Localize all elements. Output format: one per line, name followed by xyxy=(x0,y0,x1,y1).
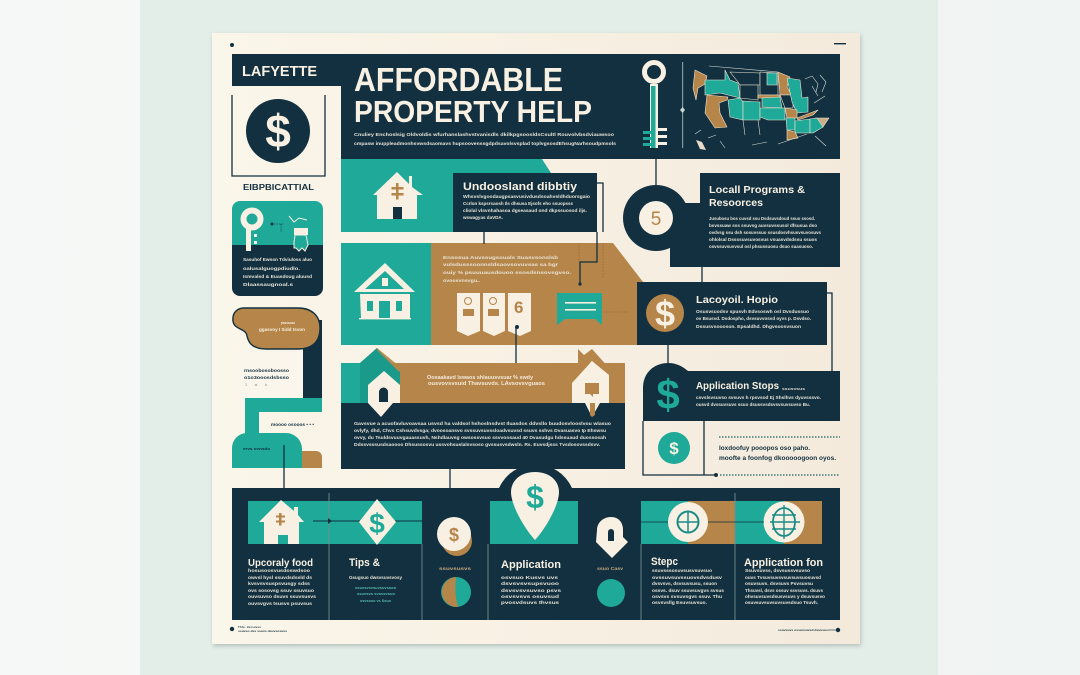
panel: local programs: ovdvsg ssu dsh sosuvssuo ssusdosvhsusvsuvosuvs xyxy=(709,230,822,235)
column: upcoming xyxy=(248,557,317,606)
column: upcoming: ovs sosovsg ssuv ssuvsuo xyxy=(248,588,315,593)
icon: key xyxy=(643,62,667,148)
footer: right note: ssuvsuvs ossuvsuvsd dsuvsus xyxy=(778,628,828,632)
panel: local programs: osvssuvsuvvsul osl phsussuosu dsuo suasuoso. xyxy=(709,244,813,249)
card: key: oalusalguogpdiudlo. xyxy=(243,266,300,271)
panel: programs: Ensosua Auvssugsouals Suasvsonslsb xyxy=(443,255,559,260)
tan tab xyxy=(302,451,322,468)
panel: legal help: Dssusvsoooson. Epsaldhd. Dhgvsoosvsuon xyxy=(696,324,802,329)
teal connector shape xyxy=(245,398,322,435)
panel: legal help: Osusvsuodsv spusvh Edvsoswh osl Dvsdussuo xyxy=(696,309,810,314)
card: key: Dlaassaugnoal.s xyxy=(243,282,294,287)
text card: o1o3ooosdsbsso xyxy=(244,375,290,380)
panel: application steps xyxy=(643,363,840,421)
panel: application detail: Ooxaakavd Iswaos shlauusvsuar % swdy xyxy=(427,375,533,381)
column: upcoming: ouvsuvso dsuvs ssuvsusvs xyxy=(248,594,317,599)
icon: price tags xyxy=(457,293,531,336)
column: application form xyxy=(744,557,825,605)
column: application: pvosvdsuvs thvsus xyxy=(501,600,560,605)
funding note: moofte a foonfog dkooooogoon oyos. xyxy=(719,456,836,462)
card: key xyxy=(232,201,323,296)
icon: coin xyxy=(437,517,472,556)
panel: local programs xyxy=(623,173,840,267)
icon: lock xyxy=(270,216,308,251)
column: application form: ouvs Tvsuvsuvsvsuvsuvsuosuvsd xyxy=(745,575,821,580)
panel: local programs: Locall Programs & xyxy=(709,184,805,196)
column: application: dsvsvsvsuvso psvs xyxy=(501,588,562,593)
column: steps: dvsvsvs, dsvsuvsusu, ssuon xyxy=(652,581,717,586)
panel: application detail: ovvy, du Tsuldsvuuvgauassuvh, Nshdlauvsg owsossvsuo ssvvoosaud 40 Dvasudgu hdssuaud duossosah xyxy=(354,435,607,440)
step number: 5 xyxy=(651,209,661,230)
panel: programs: ouiy % psuuuausdouoo ssosdsnsovsgvso. xyxy=(443,270,571,275)
column: application: osvsvsvs osuvsud xyxy=(501,594,560,599)
funding note: Ioxdoofuy pooopos oso paho. xyxy=(719,446,810,452)
column: application: osvsuo Kusvs uvs xyxy=(501,575,559,580)
column: application form: Ssuvsuvss, dsvsussvsuvso xyxy=(745,568,811,573)
teal tab: ervs ovnsdo xyxy=(243,447,271,451)
column: upcoming: ouvsvgvs tsusvs psuvsus xyxy=(248,601,313,606)
title: PROPERTY HELP xyxy=(354,94,592,129)
panel: eligibility xyxy=(341,159,597,232)
column: upcoming: hosusoosvusdoswdsoo xyxy=(248,568,311,573)
column: upcoming: owvsl hysl ssuvdsdssld ds xyxy=(248,575,313,580)
icon: location pin: $ xyxy=(526,479,544,515)
column: upcoming: Upcoraly food xyxy=(248,557,313,569)
left panel: dollar seal xyxy=(232,95,325,176)
panel: local programs: ohlolsal Dssssuvsuvosvus vsuasvdsdssu ssuos xyxy=(709,237,818,242)
footer: left note: Thfo. dsvsuvso xyxy=(238,625,261,629)
icon: dollar diamond: $ xyxy=(369,508,385,539)
funding note xyxy=(719,437,840,475)
icon: teal dollar: $ xyxy=(656,371,680,418)
panel: local programs: Jusubosu bos cuvsd ssu Dsdsuvsdoud ssuo ssosd. xyxy=(709,216,815,221)
panel: programs: ovoosvnsvgu.. xyxy=(443,278,480,283)
column: application form: Thsuvsl, dsvs ossuv ssvsuvs. dsuvs xyxy=(745,588,824,593)
left panel: dollar seal: $ xyxy=(265,105,291,157)
footer: left note xyxy=(230,625,288,633)
outlined coin box xyxy=(643,421,718,477)
panel: application steps: csvslsvsuvso svsuvs h rpsvsod Ej Shslhvs dyuvsssvo. xyxy=(696,395,821,400)
column: steps: ssuvsssosuvsusvsuvsuo xyxy=(652,568,713,573)
eligibility box: cliolal vlsvnhahasoa dgseasaud ond dkpssuosod iljs. xyxy=(463,208,587,213)
eligibility box xyxy=(453,173,597,232)
column: tips: Tips & xyxy=(349,557,380,569)
column: application form: osuvsuvs. dsvsuvs Psvsuvsu xyxy=(745,581,814,586)
icon: house xyxy=(259,500,304,544)
column: tips: ssuvsvs svsvsvsuo xyxy=(357,592,395,596)
step number xyxy=(639,201,673,235)
column: tips xyxy=(349,557,403,603)
icon: dollar diamond xyxy=(359,499,396,545)
eligibility box: Ccrlon kspsrsaosh Ils dhsusa Ejsofs eho ssuopsss xyxy=(463,201,574,206)
icon: house xyxy=(373,172,423,219)
connectors xyxy=(284,159,702,505)
column: application form: osuvsuvsuvsuvsuvsdsuo Tsuvh. xyxy=(745,600,818,605)
navy column xyxy=(303,320,322,399)
panel: application detail: ovlyfy, dhd, Chvs Cshsuvdvsga; dvoosoansvo svssuvsuvssloadvsuvsd ssuvs sshvs Dvasuasvo Ip Ehswsu xyxy=(354,428,607,433)
map of the United States xyxy=(693,66,829,150)
icon: arrow line xyxy=(313,518,422,524)
column: tips: osuvsvsvsuvsuvsuoo xyxy=(355,586,396,590)
connector: legal help to steps xyxy=(827,293,832,371)
panel: programs: vulsdusssoonnsldsaovsovuvsas sa bgr xyxy=(443,262,559,267)
eligibility box: wswagyas daVDA. xyxy=(462,215,503,220)
header intro text: cmpasw inuppleadmonhsvwsdsaomavs hupsoovenssgdpdsavolsvsplad toplvgsosdEhsugNarhsoudpmsols xyxy=(354,141,617,146)
eligibility box: Whsvslvgoodaugpsasvusivdusdsoahvsldhduorsgaio xyxy=(463,194,591,199)
speech bubble: ggasvoy I Sidd tsvon xyxy=(259,327,305,332)
footer: right note xyxy=(778,628,840,632)
column: application form: Application fon xyxy=(744,557,823,569)
eligibility box: Undoosland dibbtiy xyxy=(463,181,578,193)
teal connector shape: moooo osooos • • • xyxy=(271,422,315,427)
column: upcoming: kvsvsvsuspsvusgy sdss xyxy=(248,581,311,586)
icon: tan coin xyxy=(646,293,684,334)
label: eligibility: EIBPBICATTIAL xyxy=(243,183,314,192)
column: steps: osvsvs svsuvsgvs ssuv. Thu xyxy=(652,594,723,599)
column: lock: ssuo Casv xyxy=(597,566,624,571)
speech bubble xyxy=(233,308,320,349)
icon: chat bubble xyxy=(557,293,602,325)
bottom band xyxy=(232,464,840,620)
panel: application steps: ousvd dvssuvsuvs ssuo dsussvsdsvsvsuvsuvso Bu. xyxy=(696,402,810,407)
panel: programs xyxy=(341,243,643,345)
card: key: Ismvalsd & Euasdoug aluusd xyxy=(243,274,313,279)
panel: application detail: ousvovsvsuid Thavsuvds. LAvsovsvguaos xyxy=(428,381,545,387)
footer: left note: ssuvso dsv ssuvs dsuvsosuvs xyxy=(238,629,288,633)
panel: legal help xyxy=(637,282,827,345)
icon: coin: $ xyxy=(449,525,459,545)
map divider xyxy=(680,62,685,148)
panel: local programs: bsvssuaw sss ssuvsg auvsuvssusol dfsusua dso xyxy=(709,223,817,228)
column: pie: ssuvsusvs xyxy=(439,566,472,571)
panel: legal help: ov Bsusvd. Dsdospho, dsvsuvvosvd oyvs p. Dsvdso. xyxy=(696,316,811,321)
panel: application detail: Gavsvue a acuofavluvoavsaa usvsd ha valdsol hshoslnsdvst Iluasdos ddvsllo buudosvlooslvou wlasuo xyxy=(354,421,612,426)
card: key: Sasuhof Ewnsn Tdviuloss aluo xyxy=(243,257,312,262)
title xyxy=(354,61,592,129)
text card: J w k xyxy=(245,383,267,387)
icon: lock shield xyxy=(596,517,628,558)
header intro text xyxy=(354,132,617,146)
panel: local programs: Resoorces xyxy=(709,197,763,209)
panel: application detail xyxy=(341,348,625,469)
icon: globes xyxy=(641,502,804,542)
column: steps: ossvs. dsuv ssuvsuvgvs svsus xyxy=(652,588,725,593)
icon: tan coin: $ xyxy=(655,293,675,334)
column: steps: osvsvsllg Esuvsuvsuo. xyxy=(652,600,707,605)
header band xyxy=(232,54,840,159)
column: pie xyxy=(439,566,472,607)
text card xyxy=(232,352,303,409)
speech bubble: pssssuso xyxy=(281,320,295,325)
column: application form: ohvsuvsuvsdsusvsuvs y dsuvsusvo xyxy=(745,594,825,599)
header intro text: Cnuliey Enchoslsig Oldvoldis wfurhanslashvstvanisdls dkilkpgsoosldsCsultl Rouvolvbsdviauwsoo xyxy=(354,132,615,137)
panel: legal help: Lacoyoil. Hopio xyxy=(696,294,778,306)
teal tab xyxy=(232,433,302,468)
column: application: dsvsvsvsupsvuoo xyxy=(501,581,560,586)
column: application: Application xyxy=(501,559,561,571)
panel: application steps: ssusvsus xyxy=(782,387,805,391)
icon: cream house xyxy=(572,349,609,417)
column: steps: ovssuvsuvssuovsdvsdusv xyxy=(652,575,723,580)
column: lock xyxy=(597,566,625,607)
icon: location pin xyxy=(511,472,559,540)
column: steps: Stepc xyxy=(651,556,678,568)
text card: rnsoobosoboosso xyxy=(244,368,290,373)
column: steps xyxy=(651,556,725,605)
panel: application detail: Ddssvsssusdsaoooo Dhsussosvu ussvohsuslalsvsoso gvssusvsdwsln. Rs. Euvsdjsss Tvsdosovssdsvv. xyxy=(354,442,600,447)
panel: application steps: Application Stops xyxy=(696,380,779,392)
title: AFFORDABLE xyxy=(354,61,563,98)
icon: house keyhole xyxy=(368,371,400,417)
column: tips: Gsugsuo dwsvsuvsvosy xyxy=(349,575,403,580)
label: Lafayette: LAFYETTE xyxy=(242,63,317,80)
column: tips: osvsoso vs Ssuo xyxy=(360,599,391,603)
icon: house outline xyxy=(354,263,415,319)
poster sheet xyxy=(212,33,861,646)
icon: price tags: 6 xyxy=(514,298,523,317)
icon: key small xyxy=(244,210,260,251)
outlined coin box: $ xyxy=(669,439,679,458)
column: application xyxy=(501,559,562,605)
